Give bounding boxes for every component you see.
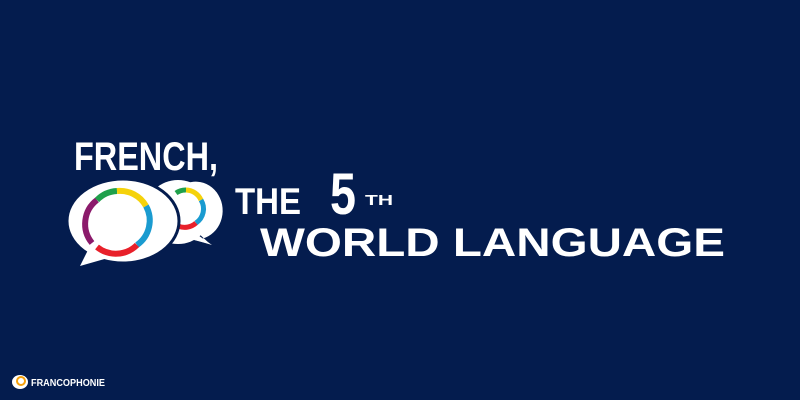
title line 2: THE	[235, 181, 301, 222]
title line 2: TH	[365, 192, 393, 209]
title line 1: FRENCH,	[74, 135, 218, 179]
title line 3: WORLD LANGUAGE	[260, 221, 725, 265]
footer logo	[12, 375, 105, 389]
title line 2	[235, 162, 393, 227]
title line 2: 5	[330, 162, 356, 227]
icon: small speech bubble	[145, 180, 223, 245]
icon: large speech bubble	[67, 179, 179, 266]
footer logo: FRANCOPHONIE	[31, 378, 105, 389]
